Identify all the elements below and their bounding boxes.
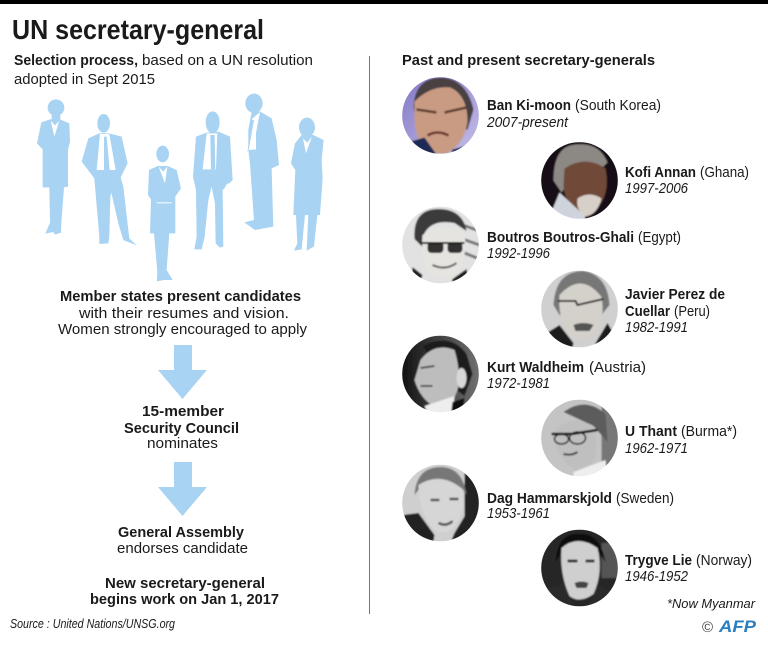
text block: general assembly — [117, 524, 248, 557]
text: Kurt Waldheim: Kurt Waldheim — [487, 359, 584, 376]
text: U Thant: 1962-1971 — [625, 440, 688, 457]
text: Kofi Annan — [625, 164, 749, 197]
text: Trygve Lie — [625, 552, 752, 585]
text: Ban Ki-moon: (South Korea) — [575, 97, 661, 114]
silhouette: man in profile — [244, 94, 279, 230]
text block: general assembly: endorses candidate — [117, 540, 248, 557]
portrait: Boutros Boutros-Ghali — [402, 206, 479, 284]
silhouette: woman in coat — [37, 99, 70, 235]
heading: selection process: adopted in Sept 2015 — [14, 71, 155, 88]
text: Trygve Lie: (Norway) — [696, 552, 752, 569]
portrait: Kofi Annan — [541, 142, 618, 219]
text: Boutros Boutros-Ghali: Boutros Boutros-Ghali — [487, 229, 634, 246]
text: Kofi Annan: Kofi Annan — [625, 164, 696, 181]
arrow: down to security council — [158, 345, 207, 399]
portrait: Dag Hammarskjold — [402, 464, 479, 542]
text: Dag Hammarskjold: (Sweden) — [616, 490, 674, 507]
text: Dag Hammarskjold: Dag Hammarskjold — [487, 490, 612, 507]
text: Kofi Annan: 1997-2006 — [625, 180, 689, 197]
text: Dag Hammarskjold — [487, 490, 674, 522]
text: Javier Perez de Cuellar: Javier Perez de — [625, 286, 725, 303]
logo: AFP: © — [702, 619, 713, 636]
text: Javier Perez de Cuellar: 1982-1991 — [625, 319, 688, 336]
icon: candidate silhouettes — [37, 94, 324, 281]
text: Boutros Boutros-Ghali: (Egypt) — [638, 229, 681, 246]
text block: general assembly: General Assembly — [118, 524, 245, 541]
text block: new secretary-general — [90, 575, 279, 608]
portrait: Ban Ki-moon — [402, 77, 479, 154]
portrait: Trygve Lie — [541, 530, 618, 606]
portrait: U Thant — [541, 400, 618, 476]
arrow: down to general assembly — [158, 462, 207, 516]
silhouette: man with cane — [193, 111, 233, 249]
heading: selection process: based on a UN resolution — [142, 52, 313, 69]
footnote: *Now Myanmar — [667, 596, 756, 611]
heading: selection process: Selection process, — [14, 52, 138, 69]
text: Ban Ki-moon — [486, 97, 661, 131]
text: Dag Hammarskjold: 1953-1961 — [487, 505, 550, 522]
text: Kurt Waldheim: 1972-1981 — [487, 375, 550, 392]
heading: past and present: Past and present secretary-generals — [402, 52, 655, 69]
text: U Thant — [625, 423, 737, 457]
text: U Thant: (Burma*) — [681, 423, 737, 440]
text block: member states — [58, 288, 308, 338]
text block: security council: nominates — [147, 435, 218, 452]
text: Javier Perez de Cuellar: (Peru) — [674, 303, 710, 320]
text: Kurt Waldheim — [487, 359, 646, 392]
logo: AFP: AFP — [718, 617, 757, 636]
top bar — [0, 0, 768, 4]
logo: AFP — [702, 617, 757, 636]
text: Javier Perez de Cuellar: Cuellar — [625, 303, 670, 320]
silhouette: man with hands in pockets — [82, 114, 137, 245]
text: Boutros Boutros-Ghali: 1992-1996 — [487, 245, 551, 262]
text block: member states: Women strongly encouraged to apply — [58, 321, 308, 338]
heading: selection process — [14, 52, 313, 88]
text: Kurt Waldheim: (Austria) — [589, 359, 646, 376]
text: U Thant: U Thant — [625, 423, 677, 440]
text block: security council: 15-member — [142, 403, 224, 420]
silhouette: woman at right — [291, 118, 324, 251]
text: Javier Perez de Cuellar — [625, 286, 725, 336]
text block: member states: Member states present candidates — [60, 288, 301, 305]
text block: security council — [124, 403, 239, 452]
text: Trygve Lie: 1946-1952 — [625, 568, 689, 585]
text block: member states: with their resumes and vision. — [78, 305, 289, 322]
silhouette: woman in front — [148, 146, 181, 281]
text: Kofi Annan: (Ghana) — [700, 164, 749, 181]
title: UN secretary-general — [12, 14, 264, 45]
text block: security council: Security Council — [124, 420, 239, 437]
text: Boutros Boutros-Ghali — [487, 229, 681, 262]
portrait: Javier Perez de Cuellar — [541, 270, 618, 348]
text block: new secretary-general: begins work on Jan 1, 2017 — [90, 591, 279, 608]
portrait: Kurt Waldheim — [402, 336, 479, 412]
text block: new secretary-general: New secretary-general — [105, 575, 265, 592]
source: Source : United Nations/UNSG.org — [10, 617, 175, 631]
text: Ban Ki-moon: 2007-present — [486, 114, 569, 131]
text: Trygve Lie: Trygve Lie — [625, 552, 692, 569]
text: Ban Ki-moon: Ban Ki-moon — [487, 97, 571, 114]
